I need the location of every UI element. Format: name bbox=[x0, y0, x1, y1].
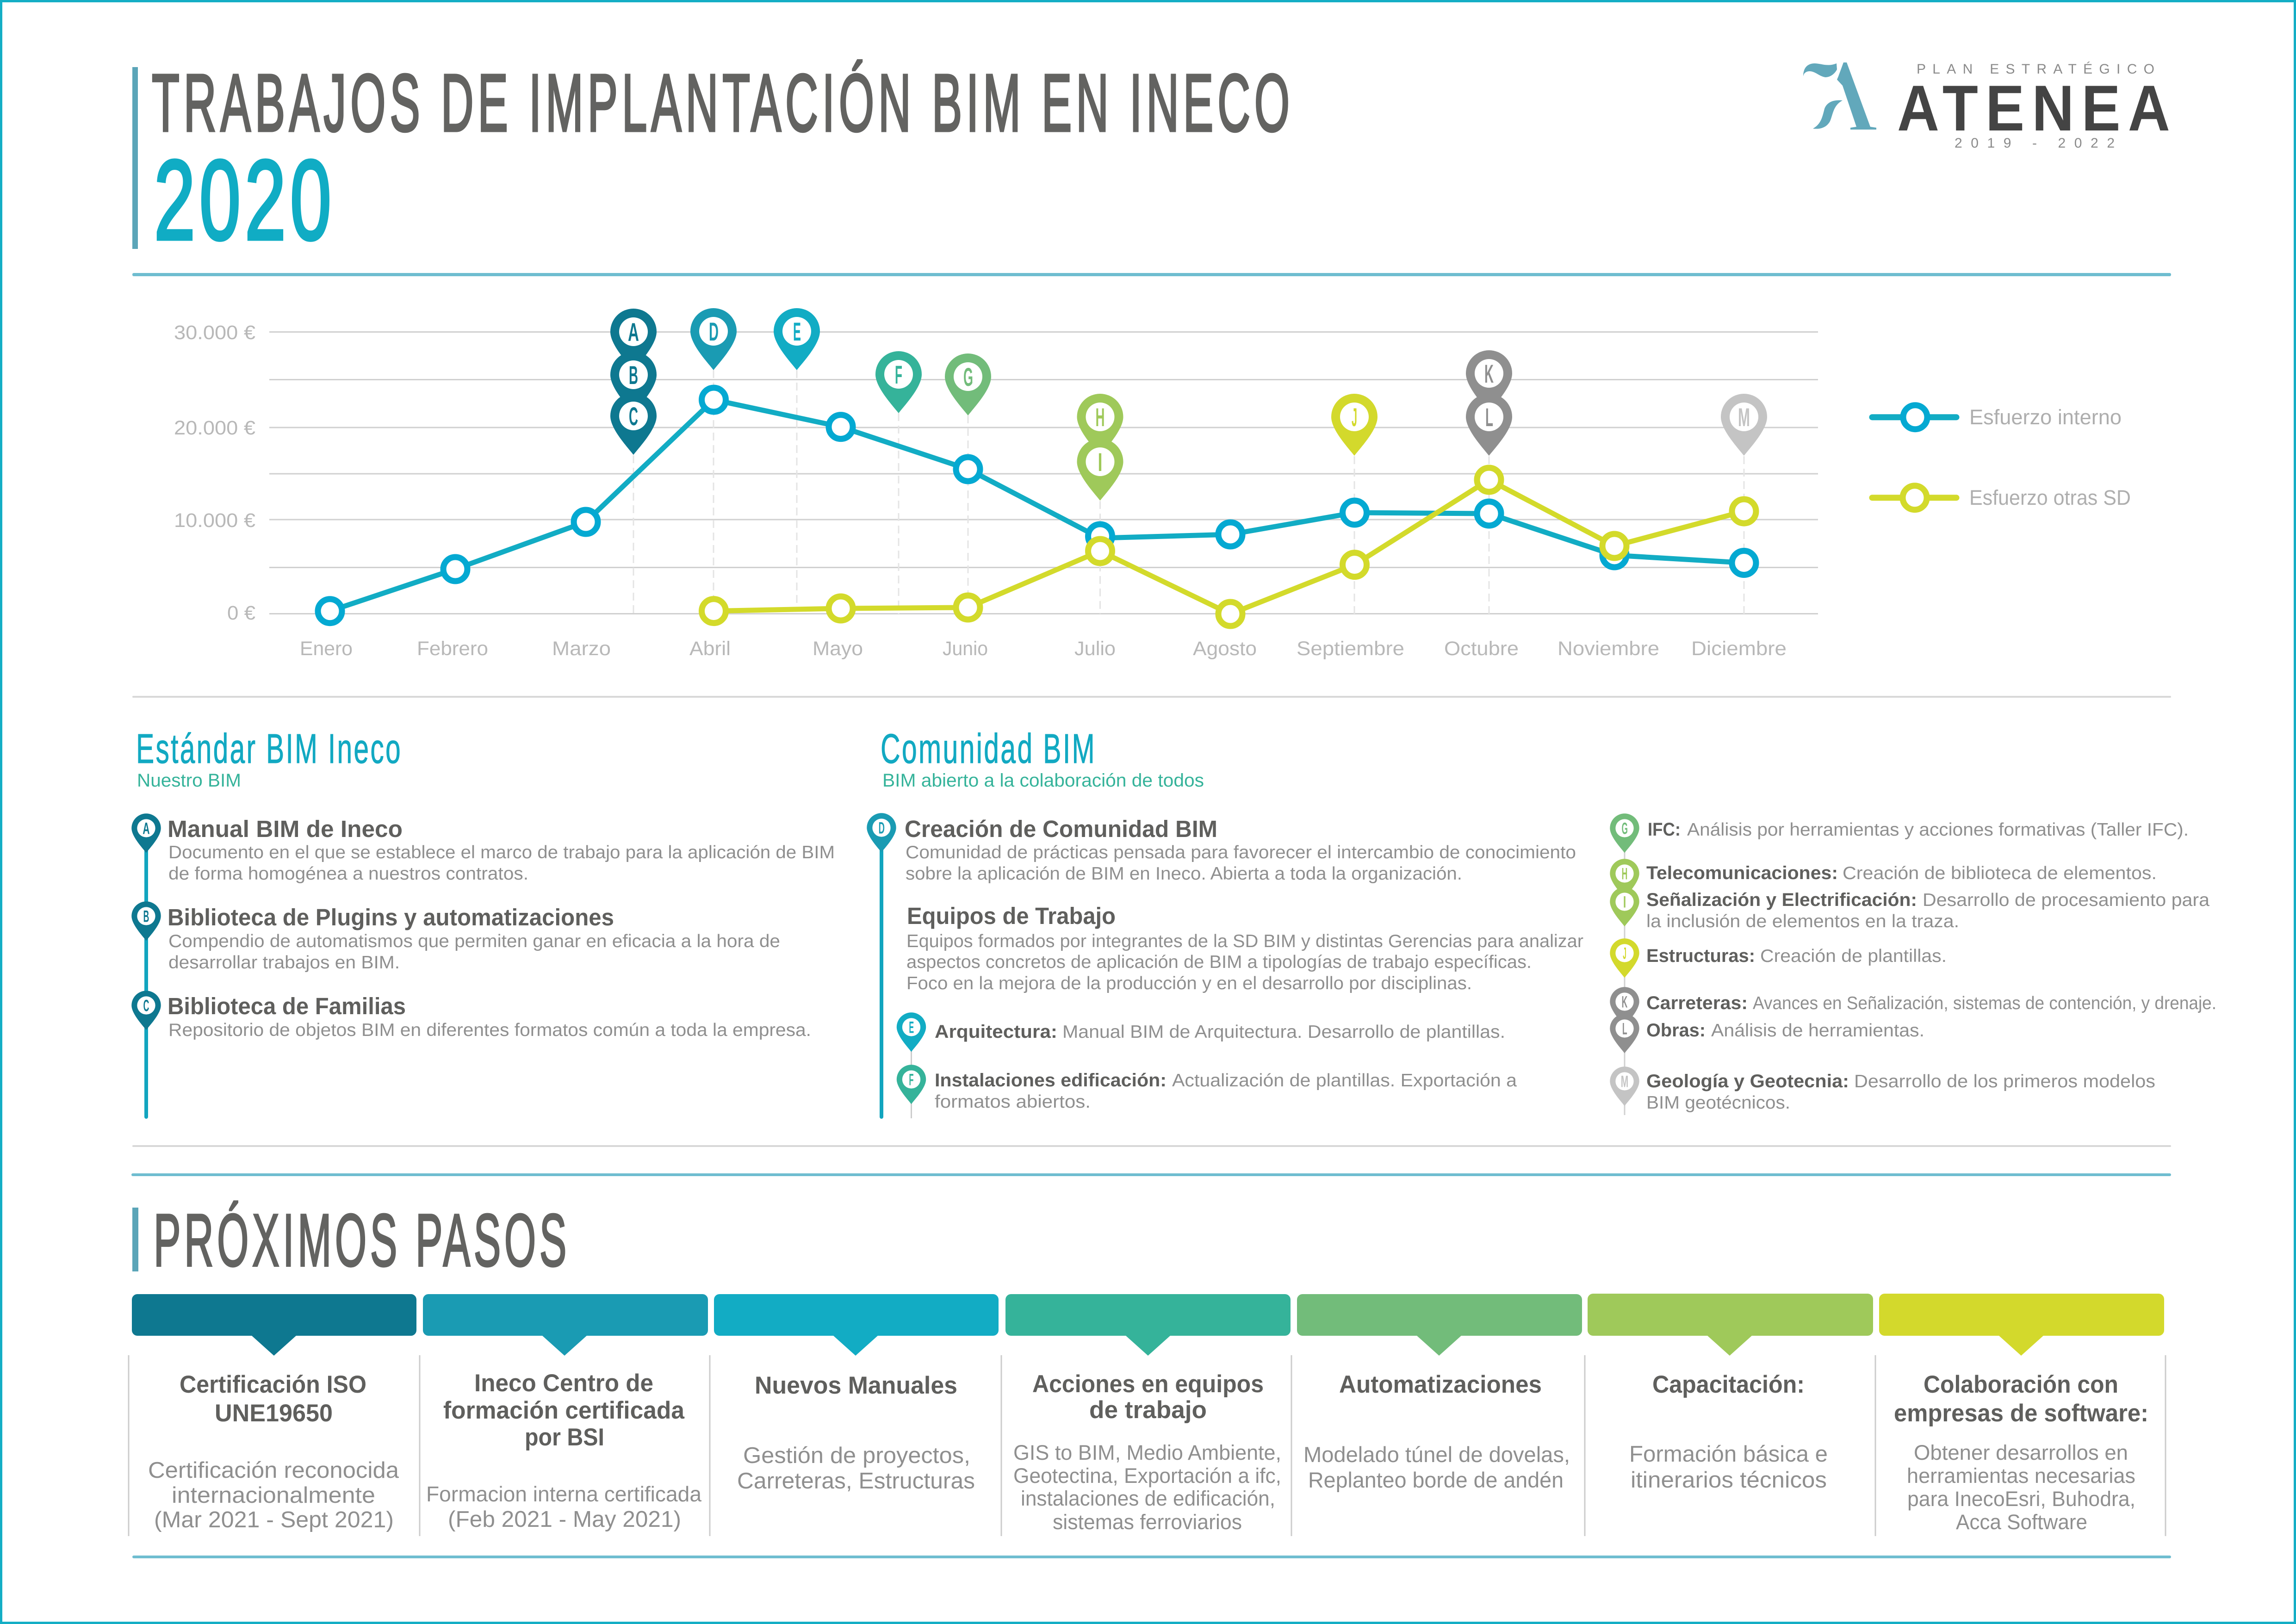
step 6: Capacitación: itinerarios técnicos bbox=[1631, 1468, 1827, 1493]
item J: Estructuras bbox=[1610, 938, 1947, 978]
step 4: Acciones en equipos de trabajo: Geotectina, Exportación a ifc, bbox=[1013, 1464, 1281, 1488]
chart pin markers A-M: D bbox=[709, 317, 719, 346]
item D: Creación de Comunidad BIM: D bbox=[879, 819, 885, 837]
chart pin markers A-M: H bbox=[1096, 403, 1105, 432]
logo: Plan Estratégico Atenea bbox=[1803, 62, 2178, 151]
y axis labels bbox=[174, 322, 255, 624]
item I: Señalización y Electrificación: Desarrollo de procesamiento para bbox=[1923, 890, 2209, 910]
step 3: Nuevos Manuales bbox=[714, 1294, 999, 1494]
item B: Biblioteca de Plugins y automatizaciones: Biblioteca de Plugins y automatizaciones bbox=[168, 904, 614, 930]
y axis labels: 30.000 € bbox=[174, 322, 255, 344]
legend: Esfuerzo interno bbox=[1969, 405, 2122, 429]
item C: Biblioteca de Familias: Repositorio de objetos BIM en diferentes formatos común a toda la empresa. bbox=[168, 1020, 811, 1040]
item M: Geología y Geotecnia: Desarrollo de los primeros modelos bbox=[1854, 1072, 2155, 1091]
item L: Obras: Obras: bbox=[1646, 1020, 1706, 1041]
step 4: Acciones en equipos de trabajo: instalaciones de edificación, bbox=[1021, 1487, 1275, 1510]
item H: Telecomunicaciones: H bbox=[1622, 865, 1627, 883]
item G: IFC: G bbox=[1622, 819, 1628, 838]
step 5: Automatizaciones bbox=[1297, 1294, 1582, 1492]
item J: Estructuras: Estructuras: bbox=[1646, 946, 1755, 966]
item G: IFC: IFC: bbox=[1648, 819, 1681, 840]
item A: Manual BIM de Ineco: de forma homogénea a nuestros contratos. bbox=[168, 864, 528, 884]
step 2: Ineco Centro de formación: por BSI bbox=[525, 1424, 604, 1451]
step 6: Capacitación bbox=[1588, 1294, 1873, 1493]
logo: Plan Estratégico Atenea: ATENEA bbox=[1897, 72, 2178, 144]
chart pin markers A-M: B bbox=[629, 360, 638, 390]
x axis labels: Septiembre bbox=[1297, 638, 1404, 660]
x axis labels: Mayo bbox=[813, 638, 863, 660]
panel: Comunidad BIM bbox=[867, 726, 1583, 1119]
item A: Manual BIM de Ineco bbox=[131, 813, 835, 884]
step 6: Capacitación: Formación básica e bbox=[1629, 1442, 1828, 1467]
item J: Estructuras: J bbox=[1623, 944, 1626, 963]
y axis labels: 20.000 € bbox=[174, 417, 255, 439]
step 4: Acciones en equipos de trabajo bbox=[1005, 1294, 1291, 1534]
item D: Creación de Comunidad BIM: Comunidad de prácticas pensada para favorecer el intercambio de conocimiento bbox=[906, 843, 1576, 862]
y axis labels: 10.000 € bbox=[174, 509, 255, 532]
step 4: Acciones en equipos de trabajo: Acciones en equipos bbox=[1032, 1370, 1264, 1398]
header: title block bbox=[132, 58, 1294, 263]
item K: Carreteras bbox=[1610, 987, 2216, 1026]
item H: Telecomunicaciones bbox=[1610, 859, 2157, 898]
x axis labels: Noviembre bbox=[1558, 638, 1659, 660]
step 1: Certificación ISO: Certificación ISO bbox=[180, 1371, 366, 1398]
step 4: Acciones en equipos de trabajo: GIS to BIM, Medio Ambiente, bbox=[1013, 1441, 1281, 1464]
block: Equipos de Trabajo: Equipos formados por integrantes de la SD BIM y distintas Gerencias para analizar bbox=[906, 931, 1583, 951]
step 1: Certificación ISO: internacionalmente bbox=[172, 1483, 375, 1508]
item C: Biblioteca de Familias: Biblioteca de Familias bbox=[168, 993, 406, 1019]
item I: Señalización y Electrificación: I bbox=[1623, 893, 1626, 911]
year: 2020 bbox=[154, 136, 335, 263]
item L: Obras: Análisis de herramientas. bbox=[1711, 1021, 1924, 1041]
heading: Próximos pasos bbox=[132, 1199, 570, 1282]
block: Equipos de Trabajo bbox=[906, 903, 1583, 993]
item E: Arquitectura: E bbox=[909, 1018, 914, 1037]
series: esfuerzo interno bbox=[318, 388, 1756, 623]
step 3: Nuevos Manuales: Carreteras, Estructuras bbox=[737, 1469, 975, 1494]
line chart: esfuerzo por mes bbox=[174, 308, 2131, 660]
step 2: Ineco Centro de formación: Formacion interna certificada bbox=[426, 1482, 701, 1506]
item D: Creación de Comunidad BIM: Creación de Comunidad BIM bbox=[905, 816, 1217, 842]
x axis labels bbox=[300, 638, 1787, 660]
item H: Telecomunicaciones: Creación de biblioteca de elementos. bbox=[1843, 863, 2157, 883]
step 1: Certificación ISO: (Mar 2021 - Sept 2021) bbox=[154, 1507, 394, 1532]
step 5: Automatizaciones: Automatizaciones bbox=[1339, 1371, 1542, 1398]
step 6: Capacitación: Capacitación: bbox=[1652, 1371, 1805, 1398]
block: Equipos de Trabajo: aspectos concretos de aplicación de BIM a tipologías de trabajo específicas. bbox=[906, 952, 1532, 972]
item E: Arquitectura: Arquitectura: bbox=[935, 1022, 1057, 1042]
chart pin markers A-M: A bbox=[628, 317, 639, 347]
item M: Geología y Geotecnia: BIM geotécnicos. bbox=[1646, 1093, 1790, 1113]
panel: Estándar BIM Ineco bbox=[131, 726, 835, 1119]
step 2: Ineco Centro de formación: formación certificada bbox=[443, 1397, 685, 1424]
step 7: Colaboración con empresas de software: empresas de software: bbox=[1894, 1400, 2148, 1427]
item K: Carreteras: Carreteras: bbox=[1646, 993, 1748, 1013]
item A: Manual BIM de Ineco: Documento en el que se establece el marco de trabajo para la aplicación de BIM bbox=[168, 843, 835, 862]
item G: IFC: Análisis por herramientas y acciones formativas (Taller IFC). bbox=[1687, 820, 2189, 840]
panel: equipos de trabajo, columna derecha bbox=[1610, 813, 2216, 1115]
item F: Instalaciones edificación: F bbox=[909, 1071, 914, 1089]
item B: Biblioteca de Plugins y automatizaciones bbox=[131, 901, 780, 973]
step 4: Acciones en equipos de trabajo: sistemas ferroviarios bbox=[1053, 1510, 1242, 1534]
step 7: Colaboración con empresas de software: herramientas necesarias bbox=[1907, 1464, 2135, 1488]
block: Equipos de Trabajo: Foco en la mejora de la producción y en el desarrollo por disciplinas. bbox=[906, 973, 1472, 993]
step 7: Colaboración con empresas de software: Colaboración con bbox=[1924, 1371, 2118, 1398]
item B: Biblioteca de Plugins y automatizaciones: B bbox=[143, 907, 149, 926]
item F: Instalaciones edificación bbox=[897, 1065, 1517, 1112]
step 2: Ineco Centro de formación: (Feb 2021 - May 2021) bbox=[448, 1507, 681, 1532]
item D: Creación de Comunidad BIM bbox=[867, 813, 1576, 884]
item A: Manual BIM de Ineco: A bbox=[143, 819, 150, 838]
chart pin markers A-M: F bbox=[895, 360, 902, 389]
item B: Biblioteca de Plugins y automatizaciones: desarrollar trabajos en BIM. bbox=[168, 953, 400, 973]
block: Equipos de Trabajo: Equipos de Trabajo bbox=[907, 903, 1116, 929]
series: esfuerzo otras SD bbox=[701, 468, 1756, 626]
chart pin markers A-M: G bbox=[963, 362, 973, 391]
x axis labels: Octubre bbox=[1444, 638, 1519, 660]
chart pin markers A-M: I bbox=[1098, 447, 1102, 477]
item K: Carreteras: K bbox=[1622, 993, 1628, 1011]
heading: Comunidad BIM: Comunidad BIM bbox=[881, 726, 1096, 772]
legend bbox=[1872, 405, 2131, 510]
item I: Señalización y Electrificación: Señalización y Electrificación: bbox=[1646, 890, 1917, 910]
item G: IFC bbox=[1610, 813, 2189, 853]
y axis labels: 0 € bbox=[227, 602, 255, 624]
x axis labels: Junio bbox=[943, 638, 988, 660]
item I: Señalización y Electrificación bbox=[1610, 887, 2209, 931]
item I: Señalización y Electrificación: la inclusión de elementos en la traza. bbox=[1646, 911, 1959, 931]
step 2: Ineco Centro de formación bbox=[423, 1294, 708, 1532]
item E: Arquitectura bbox=[897, 1012, 1505, 1052]
step 2: Ineco Centro de formación: Ineco Centro de bbox=[474, 1370, 653, 1397]
x axis labels: Julio bbox=[1074, 638, 1116, 660]
item B: Biblioteca de Plugins y automatizaciones: Compendio de automatismos que permiten ganar en eficacia a la hora de bbox=[168, 931, 780, 951]
chart pin markers A-M bbox=[610, 308, 1767, 501]
chart pin markers A-M: K bbox=[1484, 359, 1494, 388]
item M: Geología y Geotecnia bbox=[1610, 1066, 2155, 1113]
heading: Próximos pasos: PRÓXIMOS PASOS bbox=[154, 1199, 570, 1282]
subheading: BIM abierto: BIM abierto a la colaboración de todos bbox=[882, 770, 1204, 791]
step 7: Colaboración con empresas de software: para InecoEsri, Buhodra, bbox=[1907, 1487, 2135, 1511]
step 5: Automatizaciones: Modelado túnel de dovelas, bbox=[1303, 1442, 1570, 1467]
step 7: Colaboración con empresas de software: Obtener desarrollos en bbox=[1914, 1441, 2128, 1464]
item F: Instalaciones edificación: formatos abiertos. bbox=[935, 1092, 1091, 1112]
item H: Telecomunicaciones: Telecomunicaciones: bbox=[1646, 863, 1838, 883]
item L: Obras bbox=[1610, 1014, 1924, 1053]
item F: Instalaciones edificación: Instalaciones edificación: bbox=[935, 1070, 1167, 1091]
item M: Geología y Geotecnia: Geología y Geotecnia: bbox=[1646, 1071, 1849, 1091]
item A: Manual BIM de Ineco: Manual BIM de Ineco bbox=[168, 816, 403, 842]
step 4: Acciones en equipos de trabajo: de trabajo bbox=[1089, 1396, 1207, 1424]
step 1: Certificación ISO: Certificación reconocida bbox=[148, 1458, 399, 1483]
title: TRABAJOS DE IMPLANTACIÓN BIM EN INECO bbox=[152, 58, 1294, 149]
item D: Creación de Comunidad BIM: sobre la aplicación de BIM en Ineco. Abierta a toda la organización. bbox=[906, 864, 1462, 884]
step 7: Colaboración con empresas de software bbox=[1879, 1294, 2164, 1534]
chart pin markers A-M: L bbox=[1485, 403, 1493, 432]
step 3: Nuevos Manuales: Gestión de proyectos, bbox=[743, 1443, 970, 1468]
step 1: Certificación ISO: UNE19650 bbox=[215, 1400, 333, 1427]
step 5: Automatizaciones: Replanteo borde de andén bbox=[1308, 1468, 1564, 1492]
heading: Estándar BIM Ineco: Estándar BIM Ineco bbox=[136, 726, 402, 772]
chart pin markers A-M: M bbox=[1738, 403, 1750, 432]
x axis labels: Abril bbox=[689, 638, 731, 660]
item K: Carreteras: Avances en Señalización, sistemas de contención, y drenaje. bbox=[1753, 993, 2216, 1013]
item F: Instalaciones edificación: Actualización de plantillas. Exportación a bbox=[1172, 1071, 1517, 1091]
logo: Plan Estratégico Atenea: PLAN ESTRATÉGICO bbox=[1917, 62, 2154, 77]
panel: próximos pasos, columnas bbox=[128, 1294, 2166, 1536]
step 7: Colaboración con empresas de software: Acca Software bbox=[1956, 1510, 2087, 1534]
subheading: Nuestro BIM: Nuestro BIM bbox=[137, 770, 241, 791]
chart pin markers A-M: J bbox=[1352, 403, 1357, 432]
item C: Biblioteca de Familias bbox=[131, 991, 811, 1040]
x axis labels: Marzo bbox=[552, 638, 611, 660]
x axis labels: Diciembre bbox=[1691, 638, 1787, 660]
item M: Geología y Geotecnia: M bbox=[1621, 1072, 1628, 1091]
x axis labels: Agosto bbox=[1193, 638, 1257, 660]
chart pin markers A-M: E bbox=[793, 317, 801, 346]
step 1: Certificación ISO bbox=[132, 1294, 416, 1532]
x axis labels: Febrero bbox=[417, 638, 488, 660]
legend: Esfuerzo otras SD bbox=[1969, 486, 2131, 509]
logo: Plan Estratégico Atenea: 2019 - 2022 bbox=[1955, 136, 2115, 151]
x axis labels: Enero bbox=[300, 638, 353, 660]
item E: Arquitectura: Manual BIM de Arquitectura. Desarrollo de plantillas. bbox=[1062, 1022, 1505, 1042]
step 3: Nuevos Manuales: Nuevos Manuales bbox=[755, 1372, 957, 1399]
item L: Obras: L bbox=[1622, 1020, 1627, 1038]
item J: Estructuras: Creación de plantillas. bbox=[1760, 946, 1947, 966]
item C: Biblioteca de Familias: C bbox=[143, 997, 149, 1015]
chart pin markers A-M: C bbox=[629, 402, 638, 431]
